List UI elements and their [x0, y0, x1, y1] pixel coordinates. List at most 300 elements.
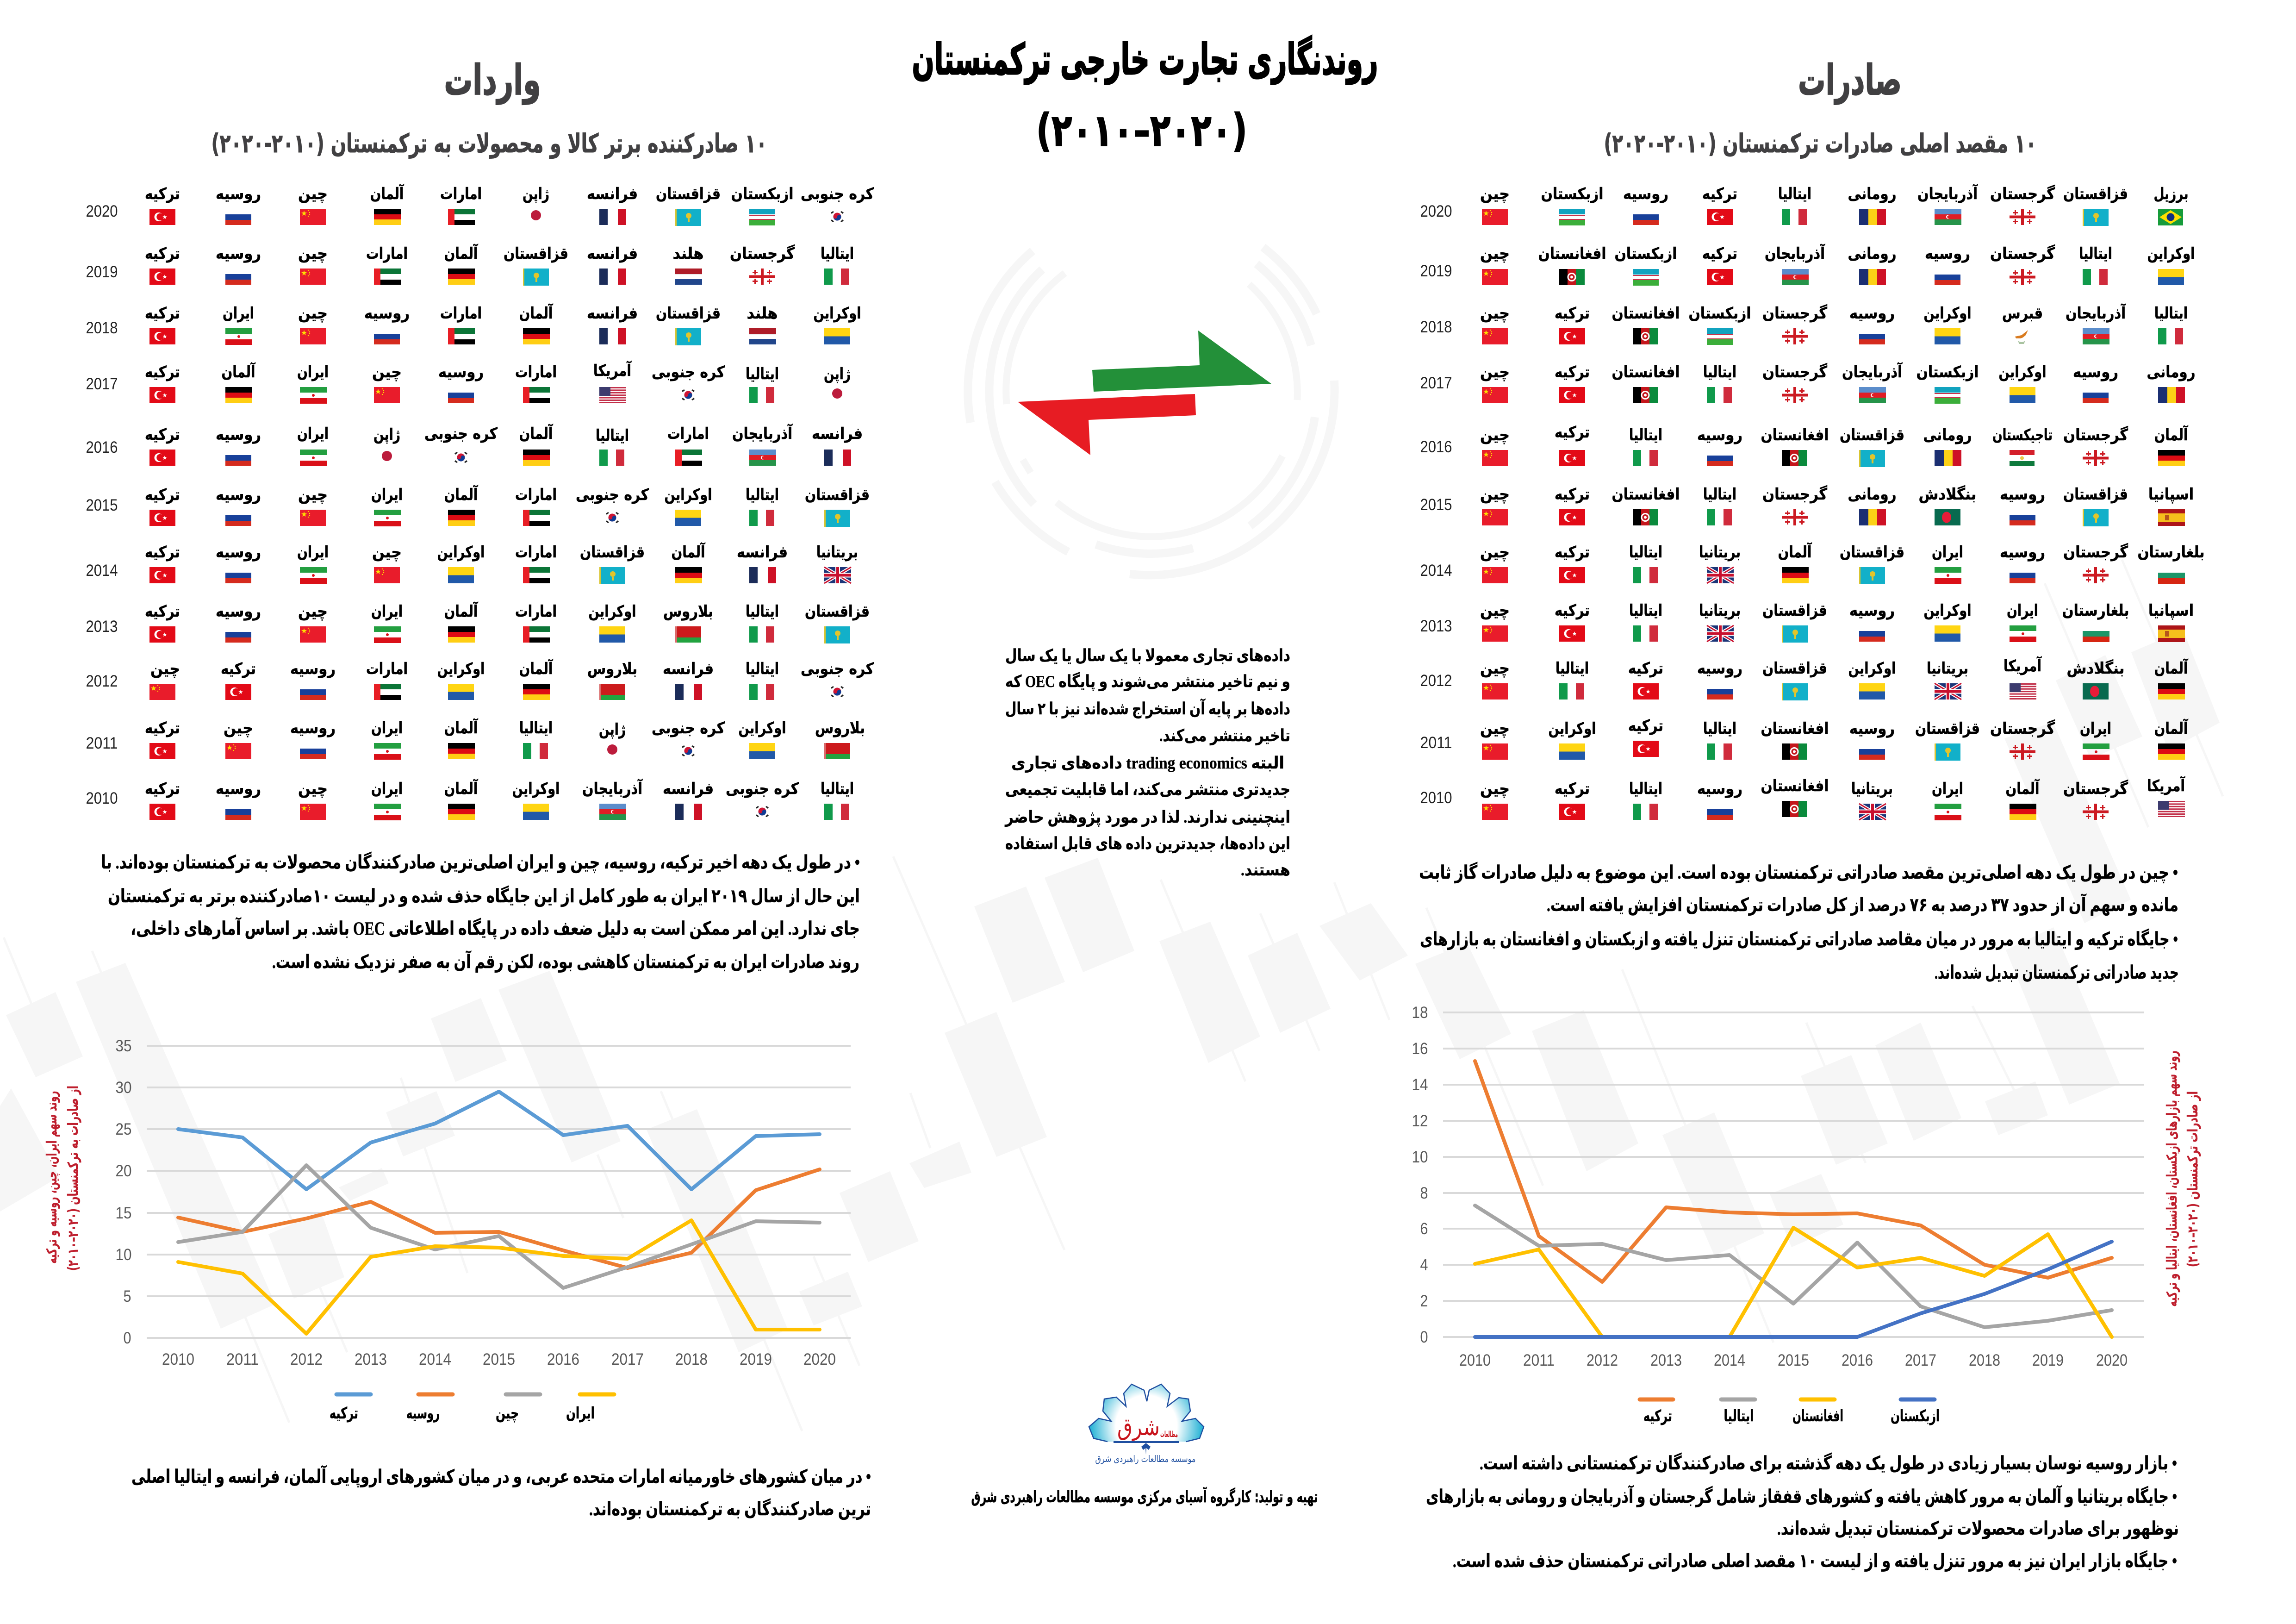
- legend: imports chart: ترکیه: [330, 1404, 358, 1423]
- row 2015 imports: ترکیه: [145, 486, 180, 504]
- chart: imports share line chart: 2018: [675, 1350, 708, 1368]
- row 2018 exports: قبرس: [2002, 304, 2043, 323]
- chart: exports share line chart: 12: [1412, 1112, 1428, 1130]
- row 2016 imports: [86, 424, 863, 466]
- row 2017 exports: ایتالیا: [1703, 363, 1736, 381]
- chart: exports share line chart: 2010: [1459, 1351, 1491, 1369]
- row 2017 exports: 2017: [1420, 374, 1452, 392]
- row 2011 exports: ایتالیا: [1703, 719, 1736, 738]
- row 2012 exports: قزاقستان: [1762, 659, 1827, 678]
- row 2016 imports: کره جنوبی: [424, 425, 498, 443]
- chart: imports share line chart: 5: [123, 1287, 131, 1305]
- text block: imports note: • در میان کشورهای خاورمیانه امارات متحده عربی، و در میان کشورهای اروپایی آلمان، فرانسه و ایتالیا اصلی: [131, 1465, 871, 1487]
- chart: imports share line chart: [116, 1037, 851, 1368]
- row 2011 imports: ترکیه: [145, 719, 180, 737]
- row 2010 exports: آمریکا: [2147, 776, 2185, 795]
- row 2010 exports: گرجستان: [2063, 780, 2128, 798]
- axis title: exports chart: [2164, 1051, 2201, 1306]
- row 2017 exports: ازبکستان: [1916, 363, 1979, 381]
- text block: imports analysis: روند صادرات ایران به ترکمنستان کاهشی بوده، لکن رقم آن به صفر نزدیک نشده است.: [272, 950, 859, 973]
- row 2017 exports: افغانستان: [1612, 363, 1680, 381]
- row 2015 imports: اوکراین: [665, 486, 712, 504]
- row 2011 exports: آلمان: [2154, 718, 2189, 738]
- row 2011 imports: بلاروس: [815, 719, 865, 737]
- row 2012 imports: 2012: [86, 672, 118, 690]
- row 2014 imports: [86, 542, 858, 584]
- row 2016 imports: ایتالیا: [596, 426, 629, 445]
- row 2018 imports: ترکیه: [145, 304, 180, 323]
- row 2010 exports: بریتانیا: [1851, 780, 1893, 798]
- row 2019 exports: [1420, 244, 2195, 286]
- row 2018 exports: گرجستان: [1762, 304, 1827, 323]
- row 2019 imports: 2019: [86, 263, 118, 281]
- row 2013 imports: ایتالیا: [746, 602, 779, 621]
- row 2018 imports: ایران: [223, 304, 254, 323]
- row 2012 imports: ترکیه: [221, 660, 256, 678]
- row 2018 exports: چین: [1480, 304, 1510, 323]
- row 2016 exports: تاجیکستان: [1992, 426, 2053, 444]
- text block: imports note: ترین صادرکنندگان به ترکمنستان بوده‌اند.: [589, 1498, 871, 1520]
- row 2012 imports: کره جنوبی: [801, 660, 874, 678]
- chart: exports share line chart: 2020: [2096, 1351, 2128, 1369]
- row 2020 imports: ژاپن: [523, 185, 549, 203]
- chart: exports share line chart: 6: [1420, 1220, 1428, 1238]
- row 2014 exports: روسیه: [2000, 543, 2045, 562]
- row 2015 exports: ترکیه: [1555, 485, 1590, 504]
- row 2010 exports: ایران: [1932, 780, 1963, 798]
- row 2015 imports: روسیه: [216, 486, 261, 504]
- row 2012 imports: [86, 659, 874, 700]
- row 2010 exports: ایتالیا: [1629, 780, 1662, 798]
- row 2017 imports: آلمان: [221, 362, 256, 381]
- row 2017 imports: ترکیه: [145, 363, 180, 381]
- text block: exports analysis: جدید صادراتی ترکمنستان تبدیل شده‌اند.: [1935, 962, 2179, 983]
- row 2010 exports: آلمان: [2006, 779, 2040, 798]
- chart: imports share line chart: 2019: [740, 1350, 772, 1368]
- row 2018 exports: افغانستان: [1612, 304, 1680, 323]
- text block: exports analysis: [1419, 862, 2179, 983]
- row 2020 imports: چین: [298, 185, 328, 203]
- row 2019 imports: گرجستان: [730, 244, 795, 263]
- row 2013 exports: قزاقستان: [1762, 601, 1827, 620]
- text block: data note: و نیم تاخیر منتشر می‌شوند و پایگاه OEC که: [1005, 672, 1290, 691]
- row 2016 imports: فرانسه: [812, 425, 863, 443]
- row 2016 exports: گرجستان: [2063, 426, 2128, 444]
- chart: exports share line chart: 2012: [1587, 1351, 1618, 1369]
- chart: imports share line chart: 2015: [483, 1350, 515, 1368]
- row 2020 imports: کره جنوبی: [801, 185, 874, 203]
- row 2018 exports: 2018: [1420, 318, 1452, 336]
- row 2010 imports: 2010: [86, 789, 118, 807]
- row 2020 imports: فرانسه: [587, 185, 638, 203]
- row 2011 exports: چین: [1480, 719, 1510, 738]
- panel: imports flag table: [86, 184, 874, 820]
- row 2010 imports: چین: [298, 780, 328, 798]
- row 2014 imports: ایران: [297, 543, 329, 562]
- legend: exports chart: [1640, 1399, 1940, 1425]
- row 2010 imports: آذربایجان: [582, 779, 643, 798]
- row 2019 exports: 2019: [1420, 262, 1452, 280]
- text block: data note: اینچنینی ندارند. لذا در مورد پژوهش حاضر: [1004, 808, 1290, 827]
- chart: exports share line chart: 10: [1412, 1148, 1428, 1166]
- icon: trade rings and exchange arrows: [968, 247, 1335, 575]
- row 2015 exports: اسپانیا: [2148, 485, 2194, 504]
- row 2014 imports: چین: [372, 543, 402, 562]
- row 2016 exports: 2016: [1420, 438, 1452, 456]
- row 2016 exports: چین: [1480, 426, 1510, 444]
- row 2016 imports: آذربایجان: [732, 424, 793, 443]
- legend: imports chart: ایران: [566, 1404, 595, 1423]
- row 2018 imports: هلند: [747, 304, 778, 323]
- row 2019 exports: ایتالیا: [2079, 244, 2112, 263]
- row 2018 exports: [1420, 303, 2188, 345]
- row 2019 exports: ترکیه: [1702, 244, 1737, 263]
- row 2019 imports: امارات: [366, 244, 408, 263]
- row 2012 exports: چین: [1480, 659, 1510, 678]
- row 2010 imports: [86, 779, 854, 820]
- icon: institute logo: [1089, 1384, 1204, 1464]
- row 2020 exports: برزیل: [2154, 185, 2188, 203]
- row 2012 exports: بریتانیا: [1927, 659, 1968, 678]
- row 2011 exports: اوکراین: [1549, 719, 1596, 738]
- text block: data note: تاخیر منتشر می‌کند.: [1159, 726, 1290, 745]
- row 2012 exports: [1420, 656, 2189, 700]
- row 2017 exports: [1420, 362, 2196, 404]
- row 2012 imports: آلمان: [519, 659, 554, 678]
- row 2014 exports: ایتالیا: [1629, 543, 1662, 562]
- row 2011 imports: روسیه: [290, 719, 336, 737]
- row 2019 imports: روسیه: [216, 244, 261, 263]
- row 2015 imports: [86, 485, 870, 527]
- main title: روندنگاری تجارت خارجی ترکمنستان: [912, 35, 1378, 85]
- chart: exports share line chart: 2013: [1650, 1351, 1682, 1369]
- row 2014 exports: قزاقستان: [1840, 543, 1904, 562]
- row 2020 imports: ازبکستان: [731, 185, 793, 203]
- row 2010 exports: ترکیه: [1555, 780, 1590, 798]
- row 2011 exports: [1420, 717, 2189, 761]
- row 2014 imports: روسیه: [216, 543, 261, 562]
- row 2019 imports: چین: [298, 244, 328, 263]
- text block: data note: جدیدتری منتشر می‌کند، اما قابلیت تجمیعی: [1005, 780, 1290, 799]
- row 2015 exports: ایتالیا: [1703, 485, 1736, 504]
- chart: imports share line chart: 2020: [803, 1350, 836, 1368]
- row 2020 imports: 2020: [86, 202, 118, 220]
- row 2018 imports: [86, 303, 861, 345]
- row 2015 exports: گرجستان: [1762, 485, 1827, 504]
- axis title: imports chart: روند سهم ایران، چین، روسیه و ترکیه: [44, 1091, 60, 1264]
- row 2014 imports: قزاقستان: [580, 543, 645, 562]
- row 2014 imports: ترکیه: [145, 543, 180, 562]
- row 2015 exports: قزاقستان: [2063, 485, 2128, 504]
- row 2011 exports: قزاقستان: [1915, 719, 1980, 738]
- row 2017 imports: امارات: [515, 363, 557, 381]
- row 2016 exports: قزاقستان: [1840, 426, 1904, 444]
- row 2018 imports: آلمان: [519, 303, 554, 323]
- row 2013 exports: بریتانیا: [1699, 601, 1741, 620]
- row 2012 exports: بنگلادش: [2067, 659, 2124, 678]
- text block: exports notes: [1426, 1452, 2179, 1572]
- row 2017 imports: روسیه: [438, 363, 484, 381]
- row 2015 exports: 2015: [1420, 496, 1452, 514]
- row 2014 imports: فرانسه: [737, 543, 788, 562]
- row 2015 imports: قزاقستان: [805, 486, 870, 504]
- row 2020 exports: قزاقستان: [2063, 185, 2128, 203]
- chart: imports share line chart: 20: [116, 1162, 131, 1180]
- row 2013 imports: ایران: [371, 602, 403, 621]
- row 2013 imports: قزاقستان: [805, 602, 870, 621]
- text block: imports analysis: این حال از سال ۲۰۱۹ ایران به طور کامل از این جایگاه حذف شده و در لیست ۱۰صادرکننده برتر به ترکمنستان: [108, 885, 860, 907]
- row 2010 exports: [1420, 776, 2185, 820]
- chart: exports share line chart: 14: [1412, 1076, 1428, 1094]
- row 2020 imports: آلمان: [370, 184, 404, 203]
- row 2019 exports: گرجستان: [1990, 244, 2055, 263]
- row 2017 imports: ایتالیا: [746, 365, 779, 383]
- heading: exports: صادرات: [1798, 56, 1902, 105]
- row 2015 imports: امارات: [515, 486, 557, 504]
- row 2019 imports: هلند: [673, 244, 703, 263]
- text block: data note: هستند.: [1241, 861, 1290, 879]
- row 2019 exports: اوکراین: [2147, 244, 2195, 263]
- row 2014 exports: چین: [1480, 543, 1510, 562]
- row 2013 exports: ایتالیا: [1629, 601, 1662, 620]
- chart: imports share line chart: 10: [116, 1246, 131, 1264]
- row 2017 imports: ژاپن: [824, 365, 851, 383]
- chart: exports share line chart: 2015: [1778, 1351, 1809, 1369]
- row 2017 imports: چین: [372, 363, 402, 381]
- row 2011 exports: ایران: [2080, 719, 2111, 738]
- icon: institute logo: موسسه مطالعات راهبردی شرق: [1095, 1453, 1196, 1464]
- row 2017 exports: رومانی: [2147, 363, 2196, 381]
- row 2010 imports: روسیه: [216, 780, 261, 798]
- row 2010 exports: روسیه: [1697, 780, 1742, 798]
- icon: institute logo: شرق: [1117, 1413, 1160, 1441]
- chart: imports share line chart: 15: [116, 1204, 131, 1222]
- row 2013 exports: [1420, 601, 2194, 643]
- row 2012 imports: امارات: [366, 660, 408, 678]
- chart: exports share line chart: 2017: [1905, 1351, 1936, 1369]
- row 2012 exports: ترکیه: [1628, 659, 1663, 678]
- row 2017 imports: آمریکا: [593, 361, 632, 380]
- row 2018 imports: 2018: [86, 319, 118, 337]
- row 2018 imports: امارات: [440, 304, 482, 323]
- chart: exports share line chart: 2011: [1523, 1351, 1555, 1369]
- row 2011 imports: چین: [224, 719, 253, 737]
- row 2012 imports: بلاروس: [587, 660, 637, 678]
- row 2013 exports: ایران: [2007, 601, 2038, 620]
- chart: exports share line chart: 0: [1420, 1328, 1428, 1346]
- row 2016 exports: آلمان: [2154, 425, 2189, 444]
- row 2017 exports: روسیه: [2073, 363, 2118, 381]
- row 2011 imports: کره جنوبی: [652, 719, 725, 737]
- row 2016 imports: ترکیه: [145, 425, 180, 444]
- text block: imports analysis: [101, 851, 860, 973]
- axis title: exports chart: روند سهم بازارهای ازبکستان، افغانستان، ایتالیا و ترکیه: [2164, 1051, 2180, 1306]
- legend: exports chart: ایتالیا: [1724, 1407, 1754, 1425]
- row 2017 imports: 2017: [86, 375, 118, 393]
- row 2020 imports: قزاقستان: [656, 185, 721, 203]
- row 2020 exports: ترکیه: [1702, 185, 1737, 203]
- row 2019 imports: ایتالیا: [821, 244, 854, 263]
- row 2013 exports: اسپانیا: [2148, 601, 2194, 620]
- row 2018 exports: ایتالیا: [2154, 304, 2188, 323]
- row 2013 exports: چین: [1480, 601, 1510, 620]
- row 2014 exports: 2014: [1420, 562, 1452, 580]
- row 2016 exports: رومانی: [1923, 426, 1972, 444]
- row 2020 exports: گرجستان: [1990, 185, 2055, 203]
- row 2016 imports: روسیه: [216, 425, 261, 444]
- legend: exports chart: افغانستان: [1792, 1407, 1843, 1425]
- row 2011 imports: ایران: [371, 719, 403, 737]
- chart: exports share line chart: 8: [1420, 1184, 1428, 1202]
- row 2019 imports: ترکیه: [145, 244, 180, 263]
- row 2013 imports: بلاروس: [663, 602, 713, 621]
- row 2016 imports: ایران: [297, 425, 329, 443]
- row 2016 exports: روسیه: [1697, 426, 1742, 444]
- row 2011 exports: ترکیه: [1628, 717, 1663, 735]
- text block: imports analysis: جای ندارد. این امر ممکن است به دلیل ضعف داده در پایگاه اطلاعاتی OEC باشد. بر اساس آمارهای داخلی،: [131, 917, 860, 939]
- row 2014 imports: امارات: [515, 543, 557, 562]
- text block: imports analysis: • در طول یک دهه اخیر ترکیه، روسیه، چین و ایران اصلی‌ترین صادرکنندگان محصولات به ترکمنستان بوده‌اند. با: [101, 851, 860, 873]
- heading: imports: واردات: [444, 56, 541, 105]
- row 2012 exports: ایتالیا: [1556, 659, 1589, 678]
- text block: data note: [1004, 646, 1290, 879]
- row 2010 imports: کره جنوبی: [726, 780, 799, 798]
- chart: exports share line chart: [1412, 1004, 2144, 1369]
- chart: imports share line chart: 2016: [547, 1350, 579, 1368]
- chart: exports share line chart: 16: [1412, 1040, 1428, 1058]
- row 2014 exports: بلغارستان: [2137, 543, 2205, 562]
- row 2013 imports: چین: [298, 602, 328, 621]
- row 2012 exports: روسیه: [1697, 659, 1742, 678]
- row 2012 imports: روسیه: [290, 660, 336, 678]
- row 2012 imports: ایتالیا: [746, 660, 779, 678]
- row 2015 exports: [1420, 485, 2194, 526]
- row 2017 imports: کره جنوبی: [652, 363, 725, 381]
- chart: imports share line chart: 2017: [611, 1350, 644, 1368]
- credit line: تهیه و تولید: کارگروه آسیای مرکزی موسسه مطالعات راهبردی شرق: [971, 1487, 1318, 1506]
- chart: exports share line chart: 2018: [1969, 1351, 2000, 1369]
- row 2018 exports: روسیه: [1849, 304, 1895, 323]
- chart: imports share line chart: 35: [116, 1037, 131, 1055]
- row 2012 imports: فرانسه: [663, 660, 714, 678]
- chart: imports share line chart: 0: [123, 1329, 131, 1347]
- row 2017 exports: گرجستان: [1762, 363, 1827, 381]
- text block: data note: داده‌های تجاری معمولا با یک سال یا یک سال: [1005, 646, 1290, 665]
- subheading: top 10 export destinations: ۱۰ مقصد اصلی صادرات ترکمنستان (۲۰۱۰-۲۰۲۰): [1604, 129, 2036, 159]
- row 2017 exports: چین: [1480, 363, 1510, 381]
- row 2019 exports: افغانستان: [1538, 244, 1606, 263]
- subheading: top 10 exporters to Turkmenistan: ۱۰ صادرکننده برتر کالا و محصولات به ترکمنستان (۲۰۱۰-۲۰۲۰): [211, 129, 767, 159]
- row 2012 exports: آلمان: [2154, 658, 2189, 678]
- row 2012 exports: 2012: [1420, 672, 1452, 690]
- row 2015 exports: افغانستان: [1612, 485, 1680, 504]
- row 2018 exports: ترکیه: [1555, 304, 1590, 323]
- row 2010 exports: چین: [1480, 780, 1510, 798]
- row 2010 exports: افغانستان: [1761, 777, 1829, 795]
- row 2020 exports: روسیه: [1623, 185, 1668, 203]
- legend: imports chart: [330, 1394, 614, 1423]
- text block: exports notes: • جایگاه بازار ایران نیز به مرور تنزل یافته و از لیست ۱۰ مقصد اصلی صادراتی ترکمنستان حذف شده است.: [1453, 1550, 2177, 1572]
- text block: data note: البته trading economics داده‌های تجاری: [1011, 754, 1284, 773]
- row 2020 exports: رومانی: [1848, 185, 1897, 203]
- row 2018 imports: اوکراین: [814, 304, 861, 323]
- row 2015 exports: بنگلادش: [1919, 485, 1976, 504]
- row 2015 imports: ایران: [371, 486, 403, 504]
- row 2010 exports: 2010: [1420, 789, 1452, 807]
- main title: (۲۰۲۰–۲۰۱۰): [1036, 105, 1247, 156]
- row 2014 exports: آلمان: [1778, 542, 1812, 562]
- legend: imports chart: چین: [496, 1404, 519, 1423]
- chart: imports share line chart: 2011: [226, 1350, 259, 1368]
- row 2013 imports: 2013: [86, 618, 118, 636]
- row 2013 exports: ترکیه: [1555, 601, 1590, 620]
- row 2013 exports: 2013: [1420, 617, 1452, 635]
- row 2018 imports: روسیه: [364, 304, 410, 323]
- chart: exports share line chart: 2014: [1714, 1351, 1745, 1369]
- chart: imports share line chart: 25: [116, 1120, 131, 1138]
- row 2015 imports: کره جنوبی: [576, 486, 649, 504]
- row 2014 exports: بریتانیا: [1699, 543, 1741, 562]
- row 2020 exports: [1420, 184, 2188, 226]
- chart: exports share line chart: 2: [1420, 1292, 1428, 1310]
- row 2020 exports: ایتالیا: [1778, 185, 1811, 203]
- row 2017 exports: آذربایجان: [1842, 362, 1903, 381]
- row 2014 exports: ایران: [1932, 543, 1963, 562]
- row 2013 imports: امارات: [515, 602, 557, 621]
- row 2011 imports: آلمان: [444, 718, 479, 737]
- row 2011 exports: روسیه: [1849, 719, 1895, 738]
- row 2019 exports: آذربایجان: [1765, 244, 1825, 263]
- row 2019 imports: [86, 244, 854, 286]
- row 2015 exports: رومانی: [1848, 485, 1897, 504]
- text block: exports notes: نوظهور برای صادرات محصولات ترکمنستان تبدیل شده‌اند.: [1777, 1518, 2179, 1539]
- main title: [912, 35, 1378, 156]
- row 2015 imports: آلمان: [444, 485, 479, 504]
- row 2013 imports: [86, 601, 870, 643]
- row 2013 imports: اوکراین: [589, 602, 636, 621]
- row 2013 imports: آلمان: [444, 601, 479, 621]
- chart: imports share line chart: 2010: [162, 1350, 194, 1368]
- row 2012 imports: اوکراین: [437, 660, 485, 678]
- row 2020 imports: امارات: [440, 185, 482, 203]
- row 2014 imports: 2014: [86, 562, 118, 580]
- row 2019 exports: ازبکستان: [1614, 244, 1677, 263]
- row 2013 imports: ترکیه: [145, 602, 180, 621]
- row 2015 imports: چین: [298, 486, 328, 504]
- row 2019 exports: روسیه: [1925, 244, 1970, 263]
- chart: exports share line chart: 4: [1420, 1256, 1428, 1274]
- row 2010 imports: فرانسه: [663, 780, 714, 798]
- row 2010 imports: ترکیه: [145, 780, 180, 798]
- row 2016 exports: افغانستان: [1761, 426, 1829, 444]
- text block: data note: این داده‌ها، جدیدترین داده های قابل استفاده: [1005, 834, 1290, 853]
- row 2015 imports: ایتالیا: [746, 486, 779, 504]
- text block: data note: داده‌ها بر پایه آن استخراج شده‌اند نیز با ۲ سال: [1005, 698, 1290, 718]
- chart: exports share line chart: 2019: [2032, 1351, 2064, 1369]
- row 2010 imports: آلمان: [444, 779, 479, 798]
- text block: imports note: [131, 1465, 871, 1520]
- chart: imports share line chart: 2013: [355, 1350, 387, 1368]
- row 2014 imports: بریتانیا: [816, 543, 858, 562]
- row 2013 imports: روسیه: [216, 602, 261, 621]
- row 2010 imports: ایتالیا: [821, 780, 854, 798]
- row 2011 imports: 2011: [86, 734, 118, 752]
- axis title: imports chart: از صادرات به ترکمنستان (۲۰۲۰–۲۰۱۰): [65, 1086, 81, 1271]
- row 2011 imports: اوکراین: [739, 719, 786, 737]
- chart: exports share line chart: 18: [1412, 1004, 1428, 1022]
- row 2020 exports: 2020: [1420, 202, 1452, 220]
- row 2012 exports: آمریکا: [2004, 656, 2042, 675]
